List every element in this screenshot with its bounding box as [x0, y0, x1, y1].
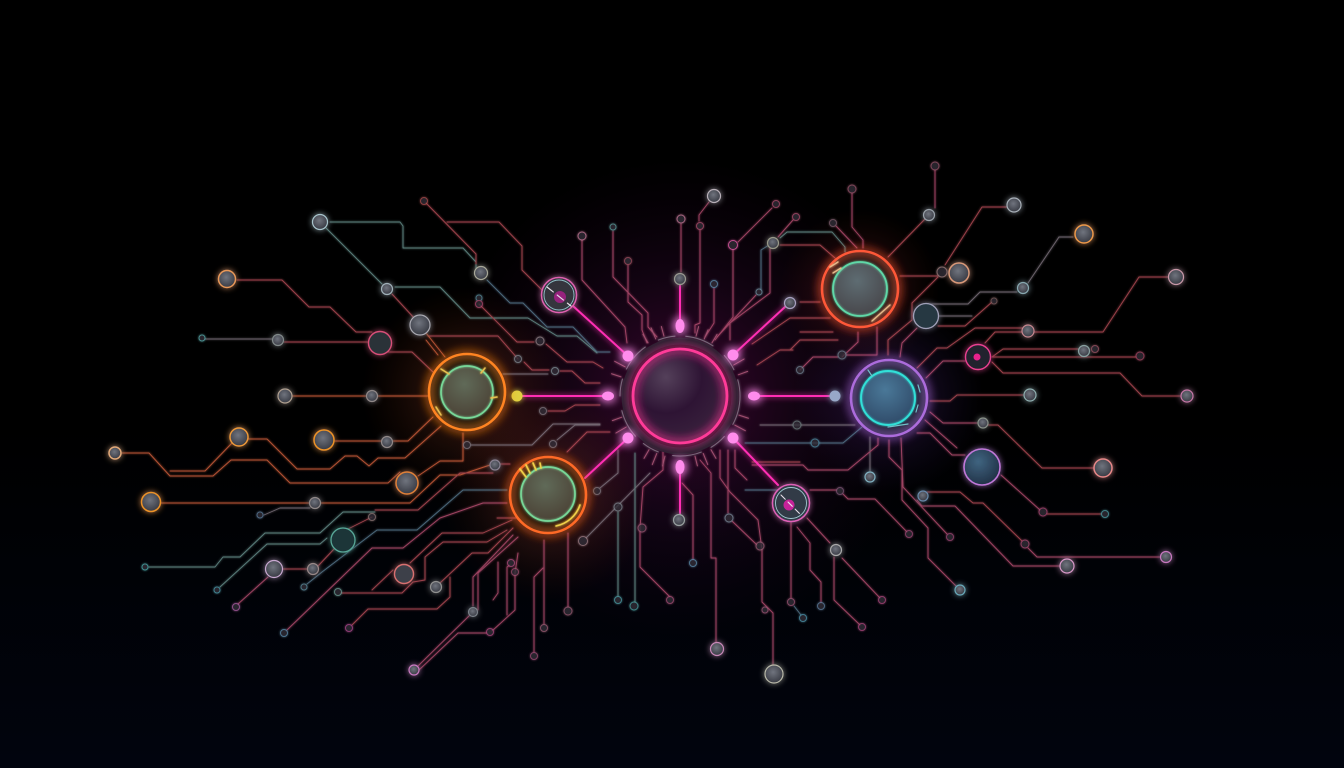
bubble: lower right blue — [964, 449, 1000, 485]
hub core — [633, 349, 727, 443]
bubble: right magenta core — [966, 344, 990, 370]
hub neon ring — [633, 349, 727, 443]
red ring node top right — [822, 251, 898, 327]
traces: right upper — [745, 170, 1180, 443]
bubble: lower magenta core — [772, 484, 810, 522]
bubble: left pink — [368, 332, 392, 354]
ambient glows — [362, 156, 984, 636]
bubble: teal lower left — [331, 528, 355, 552]
glass bubbles — [331, 304, 1000, 584]
orange and warm nodes — [109, 225, 1112, 512]
small dim nodes — [142, 162, 1144, 660]
bubble: upper right slate — [914, 304, 938, 328]
orange ring node left — [429, 354, 505, 430]
bubble: pink rim lower left — [394, 564, 414, 584]
pale nodes — [266, 190, 1193, 683]
bubble: upper magenta core — [542, 278, 576, 312]
traces: right lower — [745, 412, 1160, 586]
purple ring node right — [851, 360, 927, 436]
hub radial ticks — [612, 326, 748, 466]
central hub — [612, 326, 748, 466]
traces: left upper — [122, 203, 610, 483]
magenta pins — [602, 319, 760, 474]
orange ring node lower — [510, 457, 586, 533]
traces: bottom — [534, 450, 880, 665]
magenta spokes — [522, 284, 830, 514]
traces: top — [582, 202, 845, 343]
traces: left lower bundle — [149, 464, 535, 670]
hub outer segments — [620, 336, 740, 456]
hub outer collar — [625, 341, 735, 451]
